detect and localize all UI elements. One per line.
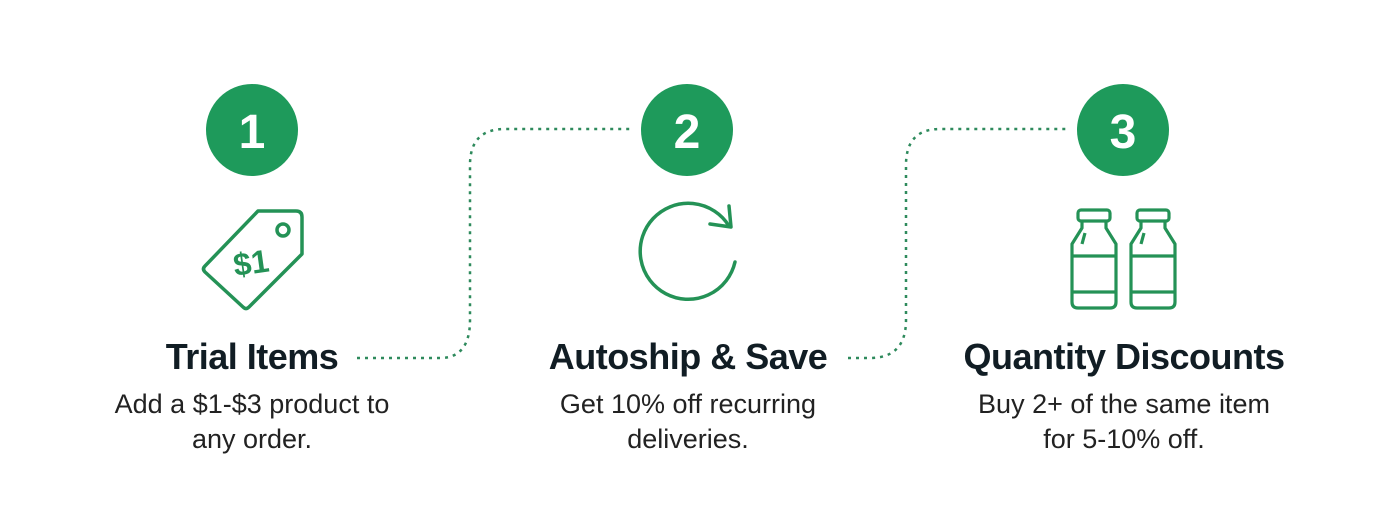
title: Autoship & Save: Autoship & Save bbox=[549, 336, 827, 377]
arrow: connector 2 to 3 bbox=[848, 129, 1068, 358]
text: autoship description bbox=[560, 389, 816, 454]
text: trial description bbox=[114, 389, 389, 454]
badge 1: 1 bbox=[239, 106, 265, 159]
title: Quantity Discounts: Quantity Discounts bbox=[963, 336, 1285, 377]
badge 2: 2 bbox=[674, 106, 700, 159]
badge 1 bbox=[206, 84, 298, 176]
text: quantity description: Buy 2+ of the same item bbox=[978, 389, 1270, 419]
text: autoship description: deliveries. bbox=[627, 424, 749, 454]
badge 3: 3 bbox=[1110, 106, 1136, 159]
text: quantity description bbox=[978, 389, 1270, 454]
icon: bottles bbox=[1072, 210, 1175, 308]
text: trial description: Add a $1-$3 product to bbox=[115, 389, 389, 419]
icon: refresh bbox=[640, 203, 735, 299]
arrow: connector 1 to 2 bbox=[357, 129, 630, 358]
icon: price tag bbox=[204, 211, 302, 308]
text: quantity description: for 5-10% off. bbox=[1043, 424, 1205, 454]
title: Trial Items: Trial Items bbox=[166, 336, 338, 377]
text: trial description: any order. bbox=[192, 424, 312, 454]
badge 3 bbox=[1077, 84, 1169, 176]
badge 2 bbox=[641, 84, 733, 176]
text: autoship description: Get 10% off recurring bbox=[560, 389, 816, 419]
icon: price tag: $1 bbox=[231, 243, 271, 283]
